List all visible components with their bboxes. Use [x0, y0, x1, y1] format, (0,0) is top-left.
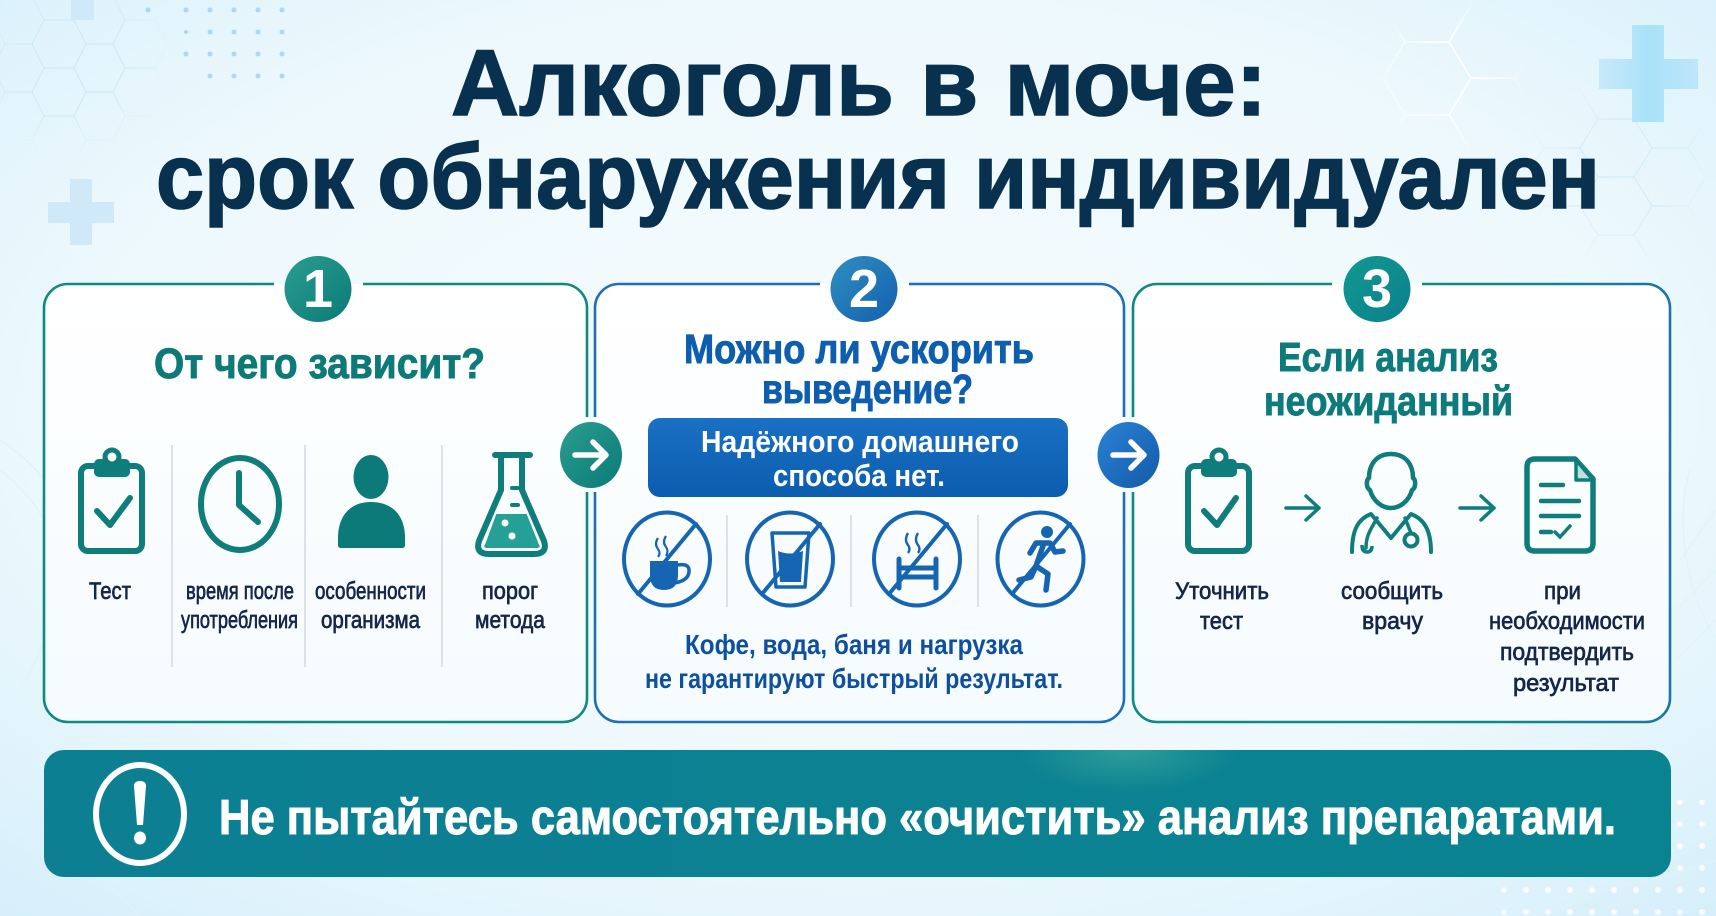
title	[156, 30, 1600, 228]
label: тест: Тест	[89, 578, 131, 605]
label: при необходимости подтвердить результат: при	[1544, 578, 1581, 605]
badge 1: 1	[303, 259, 333, 319]
label: сообщить врачу	[1341, 578, 1443, 635]
heading 2: выведение?	[762, 366, 973, 412]
badge 3: 3	[1362, 259, 1392, 319]
callout: нет способа: способа нет.	[773, 458, 945, 493]
badge 1	[284, 256, 352, 322]
panel 3: если анализ неожиданный	[1133, 256, 1670, 722]
callout: нет способа: Надёжного домашнего	[701, 424, 1019, 459]
panel 2: можно ли ускорить	[595, 256, 1124, 722]
label: время после употребления	[181, 578, 298, 634]
arrow: panel 2 to panel 3	[1098, 422, 1160, 488]
label: при необходимости подтвердить результат: подтвердить	[1500, 639, 1634, 666]
panel 1: от чего зависит	[44, 256, 587, 722]
arrow: panel 1 to panel 2	[560, 422, 622, 488]
icon: decorative cross right	[1599, 25, 1698, 122]
label: особенности организма: организма	[321, 607, 421, 634]
heading 3: неожиданный	[1264, 378, 1513, 424]
title: Алкоголь в моче:	[451, 30, 1267, 135]
text: кофе, вода: не гарантируют быстрый результат.	[645, 663, 1063, 694]
dividers	[172, 445, 442, 667]
text: кофе, вода	[645, 629, 1063, 694]
badge 3	[1344, 256, 1410, 322]
label: время после употребления: употребления	[181, 607, 298, 634]
arrow	[1286, 496, 1319, 520]
label: уточнить тест	[1175, 578, 1269, 635]
label: сообщить врачу: сообщить	[1341, 578, 1443, 605]
icon: clipboard	[81, 450, 142, 551]
icon: no exercise	[998, 512, 1084, 606]
icon: document	[1527, 459, 1593, 551]
label: порог метода: порог	[482, 578, 538, 605]
icon: flask	[478, 455, 545, 554]
label: уточнить тест: Уточнить	[1175, 578, 1269, 605]
arrow	[1460, 496, 1494, 520]
warning banner	[44, 750, 1671, 877]
label: время после употребления: время после	[186, 578, 294, 605]
icon: decorative cross left	[48, 179, 114, 245]
label: при необходимости подтвердить результат	[1489, 578, 1645, 697]
label: сообщить врачу: врачу	[1362, 608, 1423, 635]
label: порог метода: метода	[475, 607, 546, 634]
heading 3	[1264, 334, 1513, 424]
heading 1: От чего зависит?	[154, 340, 485, 388]
label: особенности организма: особенности	[315, 578, 426, 605]
label: при необходимости подтвердить результат: необходимости	[1489, 608, 1645, 635]
badge 2: 2	[849, 259, 879, 319]
dividers	[727, 515, 978, 607]
icon: doctor	[1352, 454, 1431, 552]
heading 3: Если анализ	[1278, 334, 1498, 380]
badge 2	[830, 256, 898, 322]
icon: exclamation	[96, 765, 184, 863]
callout: нет способа	[648, 418, 1068, 497]
label: особенности организма	[315, 578, 426, 634]
icon: no bath	[874, 512, 960, 606]
heading 2	[684, 326, 1034, 412]
heading 2: Можно ли ускорить	[684, 326, 1034, 372]
label: уточнить тест: тест	[1200, 608, 1243, 635]
icon: clipboard	[1188, 450, 1249, 551]
icon: no water	[747, 512, 833, 606]
icon: no coffee	[624, 512, 710, 606]
icon: clock	[201, 458, 279, 550]
label: порог метода	[475, 578, 546, 634]
text: кофе, вода: Кофе, вода, баня и нагрузка	[685, 629, 1023, 660]
icon: person	[338, 455, 405, 548]
title: срок обнаружения индивидуален	[156, 126, 1600, 228]
label: при необходимости подтвердить результат: результат	[1513, 670, 1619, 697]
